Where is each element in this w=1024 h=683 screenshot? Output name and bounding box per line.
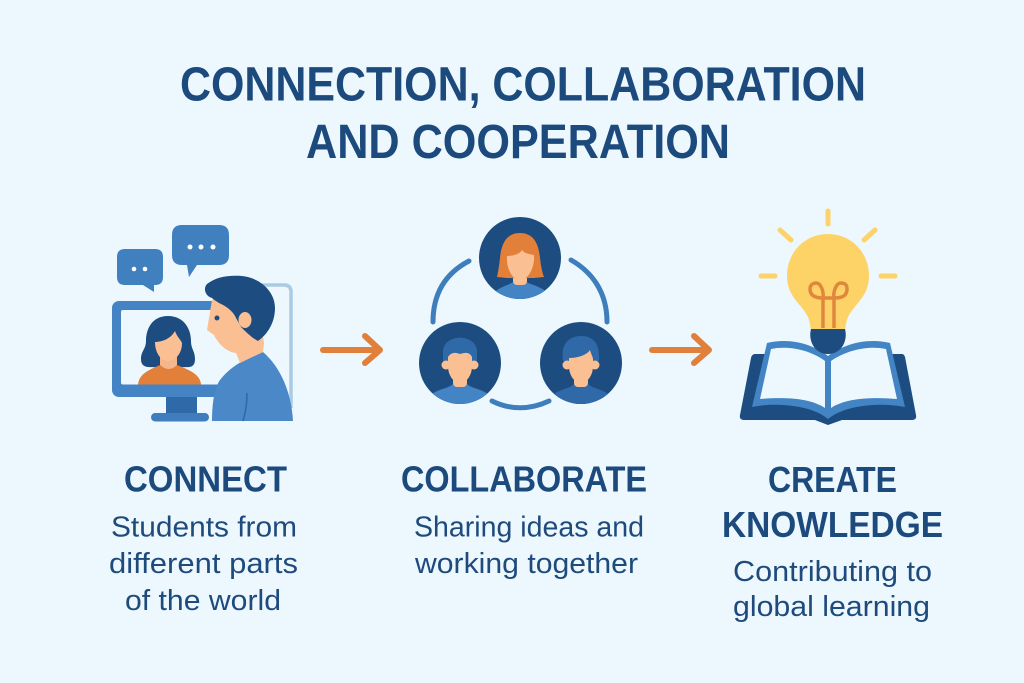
title [180,58,866,169]
bulb [787,234,869,330]
person: left man [419,322,501,410]
bulb base [810,329,846,354]
icon: video call [112,225,293,422]
column: create knowledge text: KNOWLEDGE [722,504,943,545]
connecting arcs [433,260,607,408]
book pages [752,341,905,419]
column: create knowledge text: CREATE [768,459,897,500]
column: connect text: Students from [111,512,297,544]
column: connect text: CONNECT [124,458,287,500]
arrow: connect to collaborate [323,336,380,363]
back monitor edge [262,285,291,408]
column: connect text: different parts [109,548,298,580]
column: connect text [109,458,298,617]
monitor [112,301,251,422]
column: create knowledge text: global learning [733,591,930,623]
title: CONNECTION, COLLABORATION [180,58,866,112]
column: create knowledge text: Contributing to [733,556,932,588]
icon: collaboration circle [419,217,622,410]
title: AND COOPERATION [306,116,730,169]
column: connect text: of the world [125,585,281,617]
filament [810,283,847,328]
column: collaborate text: COLLABORATE [401,458,647,500]
column: collaborate text: working together [414,548,638,580]
icon: book and light bulb [740,211,916,425]
icon: large speech bubble [172,225,229,277]
icon: small speech bubble [117,249,163,292]
person: right man [540,322,622,410]
man [205,276,293,421]
column: collaborate text: Sharing ideas and [414,512,644,544]
book cover [740,354,916,425]
arrow: collaborate to create [652,336,709,363]
column: create knowledge text [722,459,943,623]
light rays [761,211,895,276]
person: top woman [479,217,561,305]
column: collaborate text [401,458,647,580]
woman on screen [138,316,201,384]
